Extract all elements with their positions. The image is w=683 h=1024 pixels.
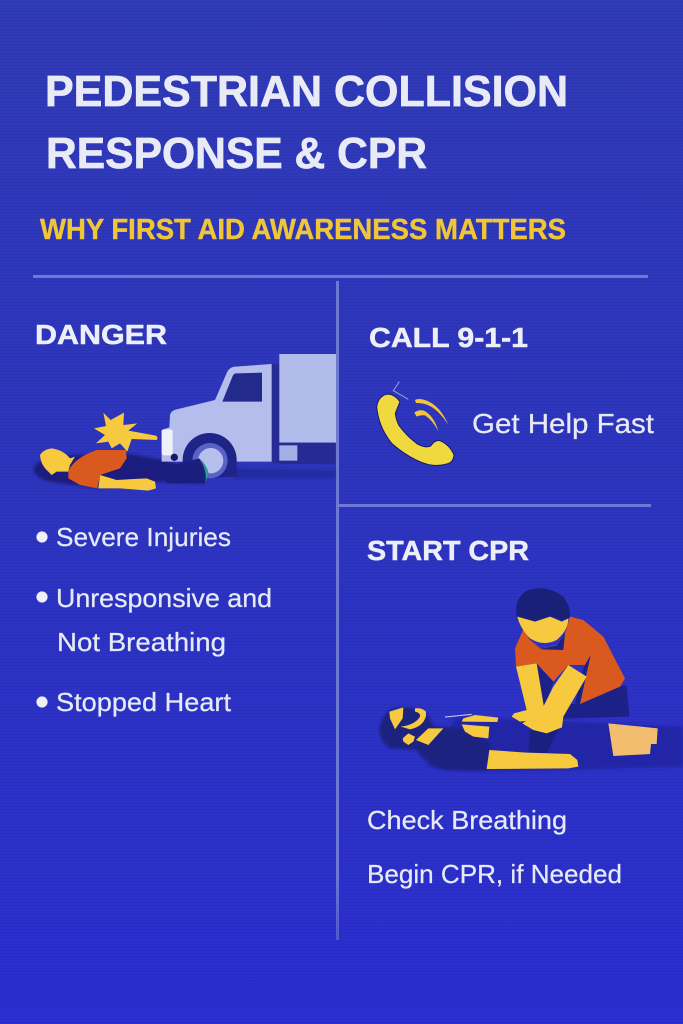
- bullet: unresponsive: Not Breathing: [57, 627, 226, 657]
- heading: danger: DANGER: [35, 319, 167, 350]
- truck: [162, 354, 336, 483]
- title: [45, 67, 568, 178]
- rescuer arms: [512, 663, 545, 722]
- patient hand: [462, 715, 498, 722]
- rescuer face: [517, 617, 568, 643]
- impact star: [94, 413, 158, 452]
- panel: start cpr: [367, 535, 683, 889]
- patient body: [427, 717, 683, 772]
- rescuer hair: [516, 588, 570, 623]
- bullet: unresponsive: Unresponsive and: [56, 583, 272, 613]
- victim leg: [167, 458, 208, 483]
- ground shadow: [233, 468, 335, 478]
- rescuer: [512, 588, 629, 733]
- illustration: truck striking pedestrian: [33, 354, 336, 491]
- title: PEDESTRIAN COLLISION: [45, 67, 568, 116]
- bullet list: danger signs: [36, 522, 272, 717]
- bullet: unresponsive: [36, 583, 272, 657]
- patient arm: [487, 750, 578, 769]
- text: get help fast: Get Help Fast: [472, 408, 654, 439]
- victim: [40, 448, 156, 491]
- panel: call 9-1-1: [369, 322, 654, 466]
- icon: phone: [377, 382, 454, 466]
- text: cpr steps: Begin CPR, if Needed: [367, 859, 622, 889]
- patient face and hair details: [389, 707, 443, 745]
- illustration: cpr: [379, 588, 683, 772]
- patient knee patch: [608, 723, 658, 756]
- dividers: [33, 275, 651, 940]
- heading: call 9-1-1: CALL 9-1-1: [369, 322, 528, 353]
- panel: danger: [33, 319, 336, 717]
- bullet: stopped heart: Stopped Heart: [56, 687, 232, 717]
- heading: start cpr: START CPR: [367, 535, 529, 566]
- text: cpr steps: Check Breathing: [367, 805, 567, 835]
- bullet: severe injuries: Severe Injuries: [56, 522, 231, 552]
- title: RESPONSE & CPR: [46, 129, 427, 178]
- subtitle: WHY FIRST AID AWARENESS MATTERS: [40, 214, 566, 246]
- text: cpr steps: [367, 805, 622, 889]
